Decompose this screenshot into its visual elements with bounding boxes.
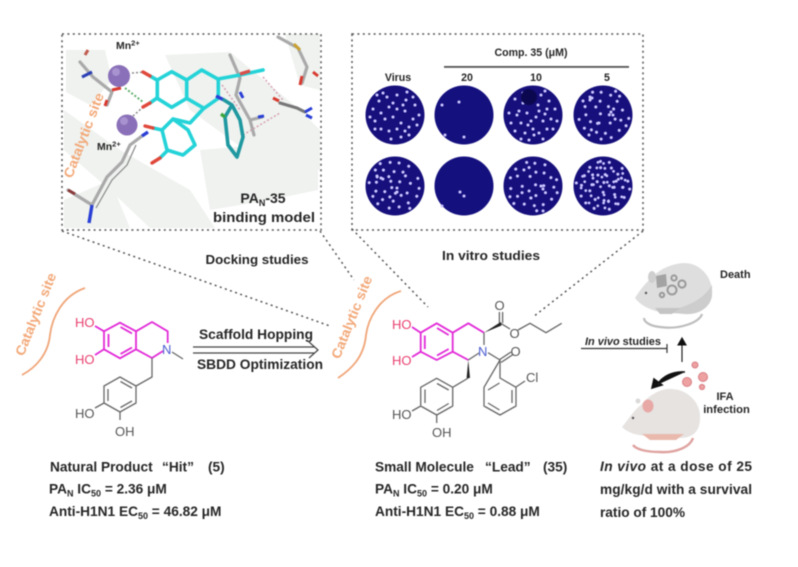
icon: dead mouse: [635, 263, 712, 328]
text block: lead data: = 0.20 μM: [427, 482, 493, 496]
label: PAN-35 binding model: -35: [265, 190, 286, 206]
plate: 20 uM 2: [434, 156, 494, 216]
catalytic site curve and label left: [12, 270, 85, 375]
panel: docking binding model: [61, 34, 321, 230]
plate: virus 2: [361, 153, 428, 219]
protein ribbons background: [64, 34, 320, 228]
label: Mn2+ top: 2+: [131, 38, 140, 48]
text block: natural product data: N: [67, 488, 74, 498]
zoom connector lines: [62, 229, 643, 326]
text block: lead data: “Lead”: [485, 460, 531, 474]
text block: lead data: 50: [417, 488, 427, 498]
label: catalytic site: Catalytic site: [61, 90, 107, 180]
icon: healthy mouse: [622, 389, 700, 452]
label: Mn2+ top: Mn: [116, 40, 131, 52]
catalytic site curve and label centre: [328, 273, 401, 378]
text block: natural product data: 50: [138, 511, 148, 521]
molecule: small molecule lead 35: HO: [392, 353, 412, 368]
label: PAN-35 binding model: binding model: [213, 209, 315, 225]
ligand sticks: [143, 70, 263, 163]
molecule: small molecule lead 35: O: [510, 326, 520, 341]
label: PAN-35 binding model: [213, 190, 315, 225]
panel: in vivo: [581, 263, 751, 452]
text block: natural product data: [49, 460, 225, 521]
text block: natural product data: = 46.82 μM: [148, 504, 221, 519]
plaque plates: [361, 84, 635, 219]
icon: manganese ions: [108, 65, 138, 136]
molecule: natural product hit 5: HO: [75, 352, 94, 367]
text block: in vivo result: [600, 459, 752, 520]
catalytic site curve and label left: Catalytic site: [12, 270, 59, 358]
arrow: up to death: [678, 338, 686, 362]
heading: Comp. 35: Comp. 35 (μM): [494, 47, 568, 59]
column labels: [385, 72, 610, 84]
molecule: small molecule lead 35: O: [494, 298, 505, 313]
molecule: natural product hit 5: HO: [75, 406, 94, 421]
molecule: small molecule lead 35: HO: [392, 317, 412, 332]
molecule: natural product hit 5: [75, 315, 183, 439]
molecule: small molecule lead 35: Cl: [526, 370, 538, 385]
interaction dashes: [125, 72, 283, 135]
plate: 10 uM 2: [503, 155, 565, 216]
text block: natural product data: “Hit”: [162, 460, 194, 474]
column labels: 5: [604, 72, 610, 84]
molecule: small molecule lead 35: HO: [392, 407, 412, 422]
residues: [68, 37, 318, 223]
catalytic site curve and label centre: Catalytic site: [328, 273, 375, 361]
plate: 10 uM 1: [504, 86, 562, 144]
stereo wedges: [484, 322, 502, 333]
molecule: natural product hit 5: HO: [75, 315, 94, 330]
label: docking studies: Docking studies: [206, 252, 308, 267]
text block: in vivo result: ratio of 100%: [600, 505, 685, 520]
column labels: 10: [530, 72, 542, 84]
label: IFA infection: [703, 391, 750, 416]
text block: lead data: 50: [464, 511, 474, 521]
plate: virus 1: [366, 86, 424, 144]
label: Mn2+ bottom: Mn: [97, 141, 112, 153]
label: in vivo studies inhibition: [581, 336, 667, 353]
molecule: natural product hit 5: OH: [115, 424, 134, 439]
label: in vitro studies: In vitro studies: [442, 248, 540, 263]
arrow: infection curve: [652, 372, 685, 388]
text block: lead data: (35): [543, 460, 567, 474]
text block: in vivo result: In vivo at a dose of 25: [600, 459, 752, 474]
plate: 5 uM 2: [572, 155, 635, 217]
column labels: Virus: [385, 72, 411, 84]
column labels: 20: [461, 72, 473, 84]
label: Mn2+ bottom: 2+: [112, 140, 121, 148]
text block: natural product data: 50: [91, 488, 101, 498]
plate: 5 uM 1: [572, 84, 633, 146]
molecule: small molecule lead 35: N: [478, 344, 487, 359]
arrow: scaffold hopping: [193, 327, 323, 372]
panel: in vitro plaque assay: [352, 34, 643, 230]
text block: lead data: PA: [375, 482, 393, 496]
arrow: scaffold hopping: SBDD Optimization: [197, 357, 323, 372]
molecule: small molecule lead 35: OH: [432, 425, 452, 440]
text block: natural product data: Natural Product: [50, 460, 153, 474]
arrow: scaffold hopping: Scaffold Hopping: [199, 327, 313, 342]
text block: lead data: N: [393, 488, 400, 498]
text block: lead data: [375, 460, 567, 521]
text block: natural product data: Anti-H1N1 EC: [49, 504, 138, 519]
label: death: Death: [720, 269, 751, 281]
text block: in vivo result: mg/kg/d with a survival: [600, 482, 752, 497]
label: IFA infection: IFA: [716, 391, 734, 403]
plate: 20 uM 1: [434, 86, 494, 144]
dashed frame: [62, 34, 321, 230]
label: PAN-35 binding model: PA: [240, 190, 259, 206]
molecule: natural product hit 5: N: [162, 342, 171, 357]
text block: natural product data: PA: [49, 482, 67, 496]
text block: lead data: IC: [400, 482, 417, 496]
text block: natural product data: IC: [74, 482, 91, 496]
molecule: small molecule lead 35: [392, 298, 562, 440]
text block: lead data: Anti-H1N1 EC: [375, 504, 464, 519]
label: IFA infection: infection: [703, 404, 750, 416]
label: PAN-35 binding model: N: [259, 198, 265, 208]
text block: natural product data: = 2.36 μM: [101, 482, 167, 496]
text block: lead data: Small Molecule: [375, 460, 474, 474]
molecule: small molecule lead 35: O: [510, 344, 521, 359]
dashed frame: [352, 34, 643, 230]
concentration bar: [444, 66, 629, 68]
icon: influenza virus particles: [682, 362, 708, 390]
text block: lead data: = 0.88 μM: [474, 504, 540, 519]
text block: natural product data: (5): [208, 460, 225, 474]
label: in vivo studies inhibition: In vivo studies: [585, 336, 661, 348]
